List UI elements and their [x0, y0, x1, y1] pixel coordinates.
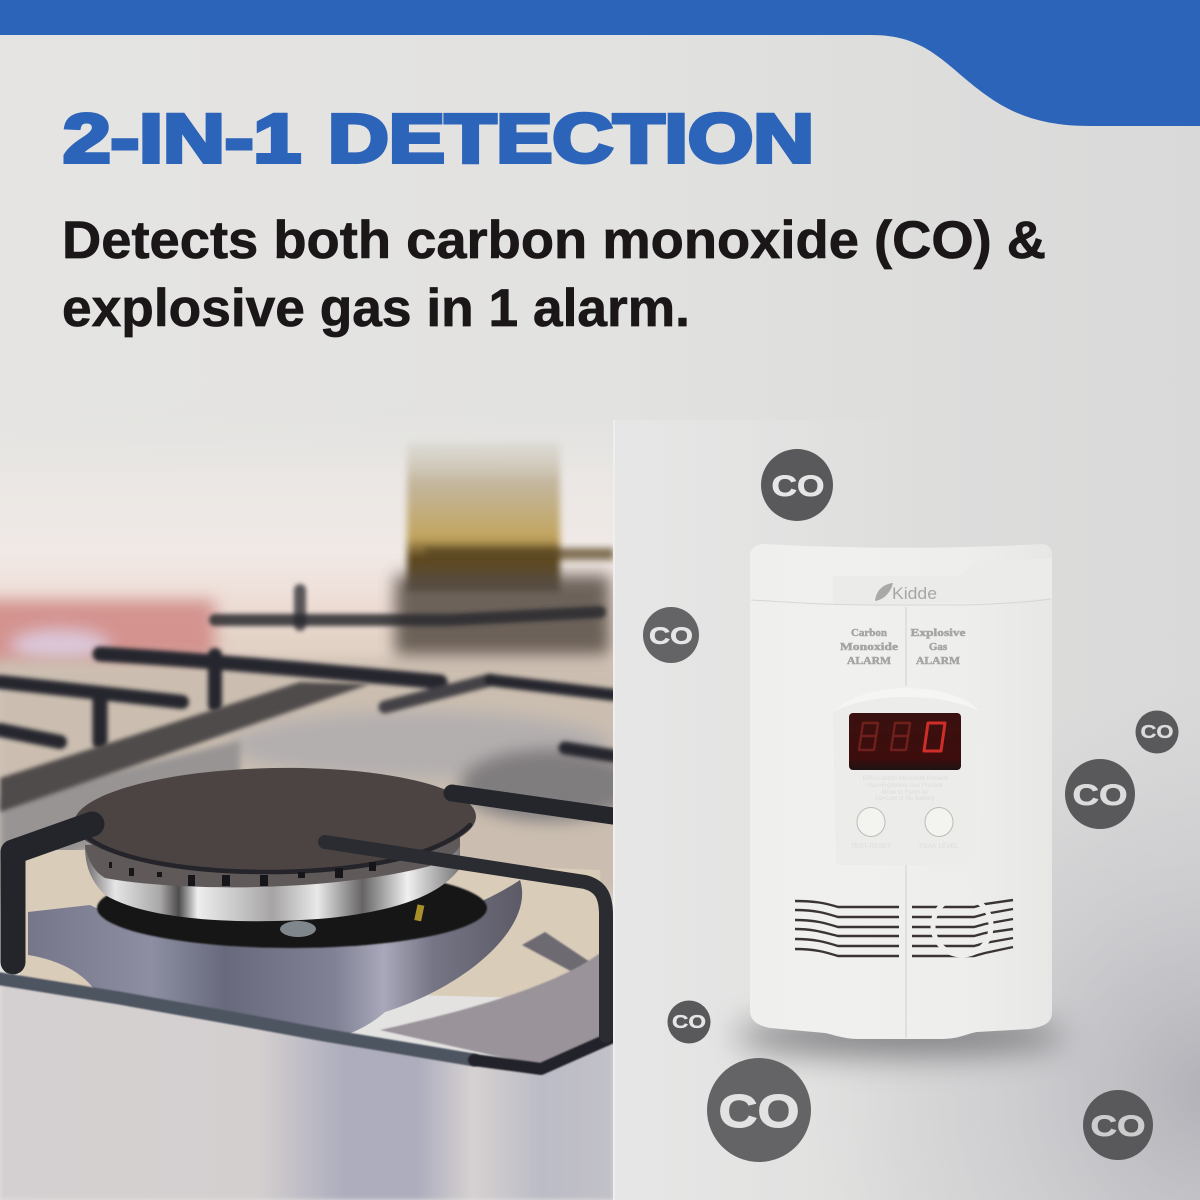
explosive gas label: Gas: [929, 641, 948, 653]
right vent slots: [912, 900, 1013, 956]
burner well metal: [28, 880, 522, 1040]
yellow igniter: [414, 904, 424, 921]
CO molecule left: CO: [649, 623, 693, 650]
title part 2: DETECTION: [328, 100, 814, 177]
subheading line 2: explosive gas in 1 alarm.: [62, 279, 690, 338]
explosive gas label: [910, 627, 966, 667]
front center panel: [833, 558, 1052, 605]
Kidde logo: Kidde: [892, 584, 937, 603]
right rear bar: [452, 793, 620, 817]
bottom rail: [0, 978, 474, 1060]
carbon monoxide label: Monoxide: [840, 641, 898, 653]
dark shelf shadow: [425, 548, 614, 560]
burner screw: [280, 921, 316, 937]
explosive gas label: Explosive: [910, 627, 966, 639]
bottom right shading: [614, 620, 1200, 1200]
test reset button: [857, 808, 885, 836]
beige hob reflection: [20, 850, 606, 1000]
blurred brown object in background: [407, 442, 560, 592]
display arch highlight: [833, 688, 979, 712]
carbon monoxide label: [840, 627, 898, 667]
instruction legend: Lb=Low or No Battery: [876, 796, 934, 802]
peak level button: [925, 808, 953, 836]
burner ring upper band: [85, 838, 460, 888]
dim digit one: [859, 723, 878, 750]
button labels: TEST-RESET: [851, 843, 891, 850]
cap seam: [751, 599, 1051, 605]
alarm shadow: [735, 1016, 1065, 1056]
lower plate: [380, 950, 604, 1066]
front pan support: [0, 793, 620, 1069]
CO molecule top: [761, 449, 833, 521]
button labels: PEAK LEVEL: [919, 843, 959, 850]
lilac reflection: [10, 629, 110, 661]
title part 1: 2-IN-1: [63, 100, 301, 177]
burner cap: [73, 764, 477, 876]
left hob metal: [0, 740, 240, 860]
lit digit: [924, 723, 945, 751]
LED digits: [859, 723, 945, 751]
panel: right side background: [613, 420, 1200, 1200]
burner flame ports: [109, 862, 376, 886]
button labels: [851, 843, 959, 850]
rear dark clutter: [395, 575, 610, 655]
CO molecule small bottom left: [668, 1000, 710, 1044]
blurred red backsplash: [0, 600, 215, 670]
bottom rail shadow area / counter foreground: [0, 980, 614, 1200]
product: carbon monoxide and gas alarm: [750, 544, 1052, 1039]
top blue banner: [0, 0, 1200, 126]
instruction legend: Gas=Explosive Gas Present: [867, 783, 943, 789]
panel edge highlight: [613, 420, 615, 1200]
CO molecule large: CO: [718, 1085, 800, 1137]
subheading line 1: Detects both carbon monoxide (CO) &: [62, 211, 1046, 270]
title: [63, 100, 814, 177]
blurred hob surface: [0, 660, 630, 900]
Kidde logo leaf: [875, 583, 893, 601]
kitchen wall: [0, 470, 613, 664]
center seam: [905, 607, 907, 1038]
CO molecule right: CO: [1072, 779, 1128, 812]
metal patch: [522, 932, 590, 975]
CO molecule small right: CO: [1140, 722, 1174, 742]
explosive gas label: ALARM: [916, 655, 961, 667]
bottom rail corner: [474, 1034, 620, 1069]
dim digit two: [891, 723, 910, 750]
CO molecule top: CO: [772, 470, 824, 503]
CO molecule right: [1065, 759, 1135, 829]
LED display: [849, 713, 961, 770]
carbon monoxide label: ALARM: [847, 655, 892, 667]
left vent slots: [795, 901, 899, 956]
burner cap rim: [76, 825, 470, 872]
hob metal dark reflection: [460, 749, 640, 821]
display recess: [833, 688, 979, 865]
hob metal lighter reflection: [230, 711, 610, 779]
left support leg: [13, 824, 92, 962]
CO molecule left: [643, 607, 699, 663]
instruction legend: EPA=Carbon Monoxide Present: [863, 776, 948, 782]
photo: gas stove burner: [0, 444, 613, 1200]
instruction legend: [863, 776, 948, 802]
right front bar and leg: [325, 842, 606, 1036]
alarm body: [750, 544, 1052, 1039]
diagonal grate: [0, 682, 370, 812]
CO molecule large: [707, 1058, 811, 1162]
instruction legend: Move to Fresh Air: [881, 790, 929, 796]
carbon monoxide label: Carbon: [851, 627, 887, 639]
blurred rear grates: [0, 590, 614, 756]
speaker ring embossed over vents: [933, 897, 991, 955]
burner recess shadow: [96, 882, 488, 949]
CO molecule bottom right: [1083, 1090, 1153, 1160]
subheading: [62, 211, 1046, 338]
CO molecule small bottom left: CO: [672, 1012, 706, 1032]
CO molecule small right: [1136, 710, 1178, 754]
burner silver ring: [85, 846, 460, 922]
CO molecule bottom right: CO: [1090, 1110, 1146, 1143]
left brightening: [615, 420, 915, 1200]
